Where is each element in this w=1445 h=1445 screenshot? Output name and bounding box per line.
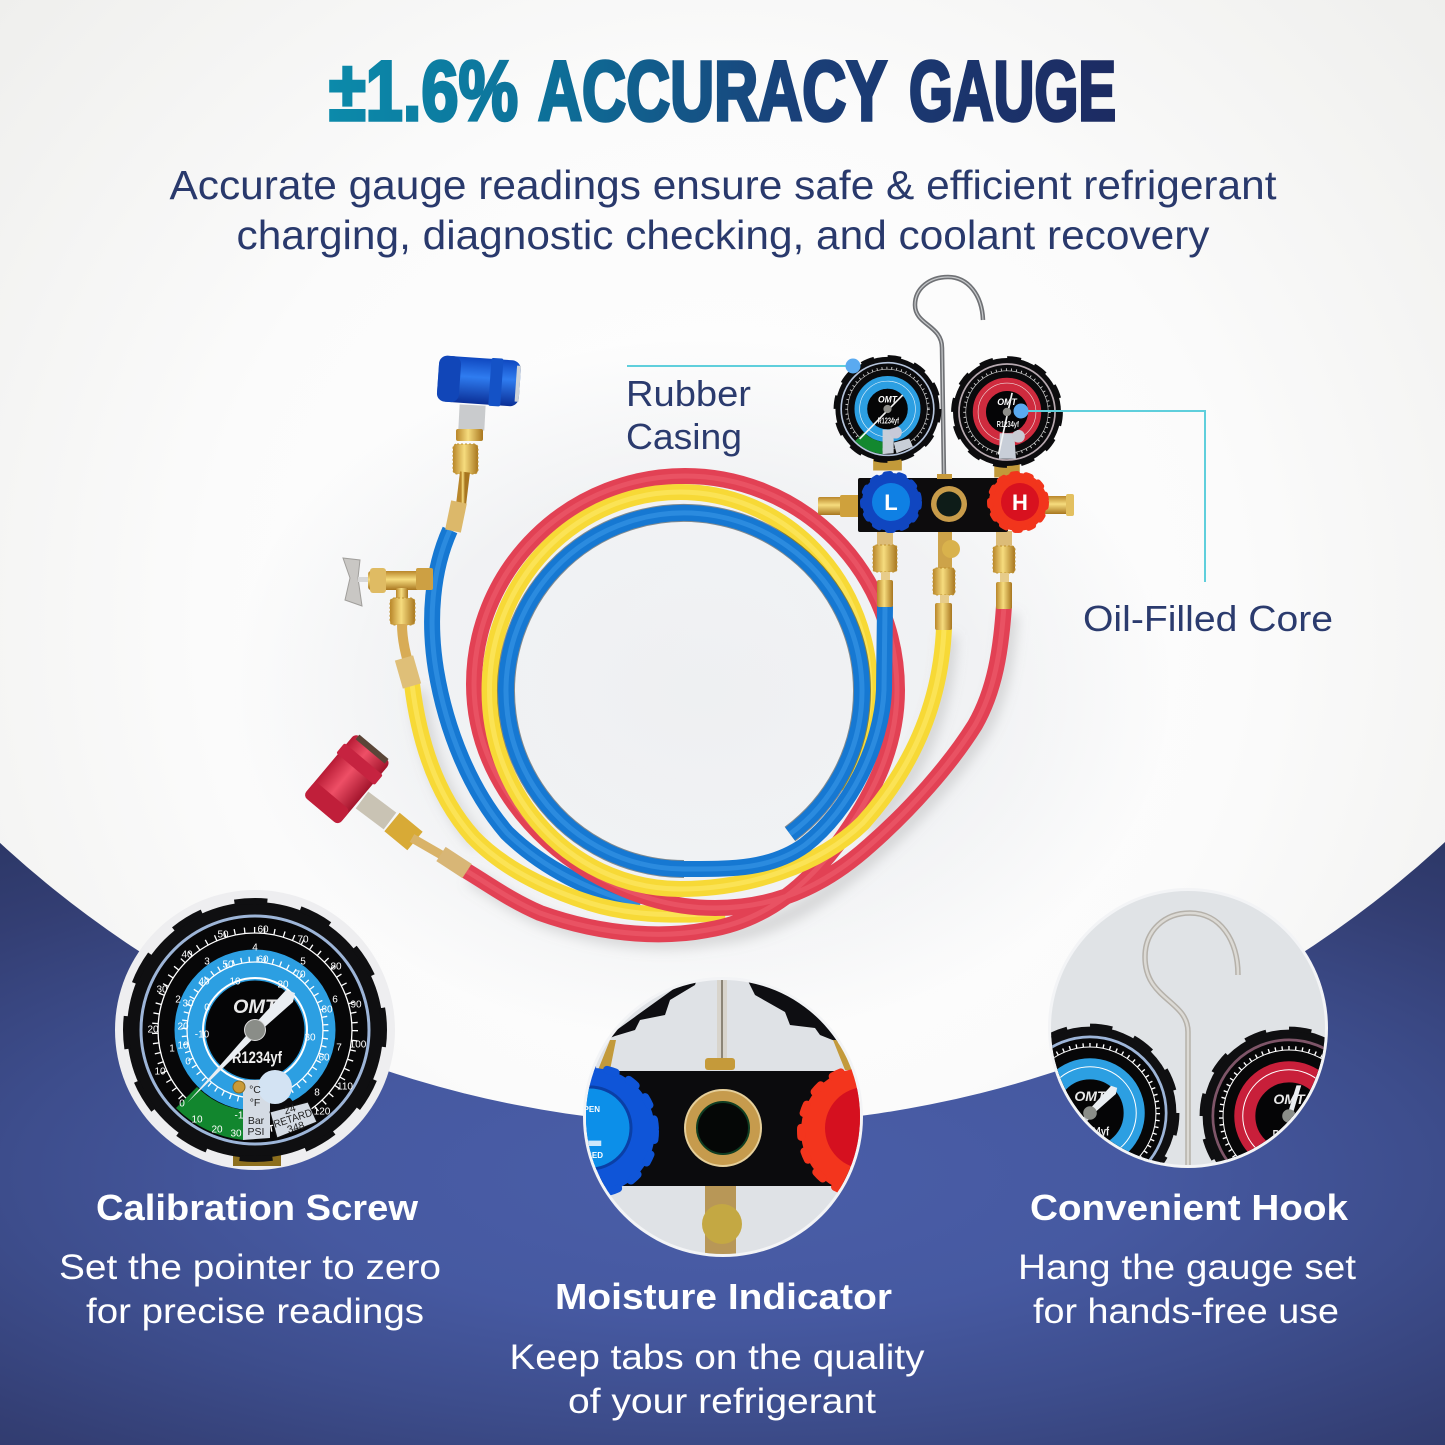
outer scale numbers: 20 [177,1022,189,1033]
blue knob [586,1068,654,1192]
brass cap [702,1204,742,1244]
low side gauge: R1234yf [878,416,899,425]
unit labels: °C [249,1084,261,1096]
moisture sight glass [931,486,967,522]
inset: gauge close-up: R1234yf [232,1048,282,1067]
low side blue knob [862,473,920,531]
nut [705,1058,735,1070]
outer scale numbers: -1 [235,1111,244,1122]
callout: oil-filled core: Oil-Filled Core [1083,598,1333,639]
inset: sight glass close-up: OPEN [577,1105,600,1114]
hook nut [937,474,952,479]
blue hose loop [506,513,862,869]
description [510,1338,925,1421]
calibration screw [233,1081,245,1093]
high side red knob [989,473,1047,531]
lower brass fittings [873,531,1015,630]
outer scale numbers: -10 [195,1030,210,1041]
description [59,1248,441,1331]
outer scale numbers: 40 [181,950,193,961]
panel: moisture indicator [510,970,927,1421]
panel: calibration screw [59,890,441,1331]
unit labels: RETARD [272,1107,314,1131]
description: Hang the gauge set [1018,1248,1356,1287]
outer scale numbers: 20 [147,1025,159,1036]
right gauge: R1234yf [1273,1127,1309,1141]
outer scale numbers: 30 [304,1033,316,1044]
outer scale numbers: 2 [175,995,181,1006]
inset: hook close-up [1050,891,1328,1168]
left side brass fitting [818,495,860,517]
outer scale numbers: 80 [330,962,342,973]
heading: Convenient Hook [1030,1187,1349,1228]
outer scale numbers: 7 [336,1043,342,1054]
gauge bezels [612,982,696,1038]
outer scale numbers: 30 [230,1129,242,1140]
outer scale numbers: 5 [300,957,306,968]
blue hose main [640,606,885,869]
pointer [187,1028,258,1103]
right side brass fitting [1044,494,1074,516]
description: for precise readings [86,1292,424,1331]
unit labels [248,1084,314,1138]
yellow hose free strand [412,684,725,915]
unit labels: 24 [283,1102,297,1117]
callout: oil-filled core [1014,404,1333,639]
zero adjust bubble [258,1070,292,1104]
brass stem [705,1186,736,1261]
white arc panel [0,0,1445,1125]
outer scale numbers: 70 [297,935,309,946]
callout: rubber casing: Rubber [626,373,751,414]
outer scale numbers: 10 [191,1115,203,1126]
unit labels: Bar [248,1115,265,1127]
outer scale numbers: 10 [154,1067,166,1078]
outer scale numbers: 30 [156,985,168,996]
product photo: manifold gauge set [301,277,1074,941]
high side red knob: H [1012,490,1028,515]
low side blue knob: L [884,490,898,515]
outer scale numbers [147,925,367,1140]
outer scale numbers: 6 [332,995,338,1006]
outer scale numbers: 3 [204,957,210,968]
outer scale numbers: 30 [182,999,194,1010]
outer scale numbers: 0 [185,1057,191,1068]
description: of your refrigerant [568,1382,876,1421]
title: ACCURACY [538,44,887,138]
description [1018,1248,1356,1331]
inset: gauge close-up: OMT [233,997,278,1018]
unit labels: 348 [286,1119,306,1136]
red quick coupler [301,731,467,871]
outer scale numbers: 100 [350,1040,367,1051]
outer scale numbers: 20 [211,1125,223,1136]
title: GAUGE [909,44,1116,138]
blue quick coupler [436,354,522,531]
left gauge [1051,1024,1180,1163]
outer scale numbers: 60 [257,955,269,966]
low side gauge: OMT [878,394,898,404]
sight glass [685,1090,761,1166]
T-valve with thumb screw [343,558,433,686]
hook [915,277,983,478]
description: for hands-free use [1033,1292,1339,1331]
callout: rubber casing: Casing [626,416,742,457]
red knob [801,1069,860,1189]
heading: Moisture Indicator [555,1276,892,1317]
outer scale numbers: 10 [229,977,241,988]
outer scale numbers: 50 [217,930,229,941]
panel: convenient hook [1021,891,1356,1324]
hose shadow [418,614,1010,941]
subtitle [170,162,1277,258]
inset: sight glass close-up: L [573,1104,603,1157]
soft shading behind product [230,340,1170,1040]
hook wire [1145,913,1238,1170]
manifold bar [600,1071,850,1186]
description: Keep tabs on the quality [510,1338,925,1377]
title [329,44,1116,138]
unit labels: PSI [248,1126,264,1138]
subtitle: Accurate gauge readings ensure safe & efficient refrigerant [170,162,1277,208]
callout: rubber casing [626,358,860,457]
outer scale numbers: 8 [314,1088,320,1099]
outer scale numbers: 70 [294,970,306,981]
outer scale numbers: 1 [169,1044,175,1055]
outer scale numbers: 4 [252,943,258,954]
low side gauge [835,357,940,470]
right gauge: OMT [1273,1092,1306,1107]
heading: Calibration Screw [96,1187,419,1228]
blue hose free strand [432,530,640,905]
outer scale numbers: 10 [177,1041,189,1052]
inset: gauge close-up [115,890,395,1170]
high side gauge: R1234yf [997,419,1019,429]
outer scale numbers: 40 [198,977,210,988]
outer scale numbers: 80 [321,1005,333,1016]
outer scale numbers: 120 [314,1107,331,1118]
outer scale numbers: 20 [277,980,289,991]
high side gauge [953,358,1061,477]
unit labels: °F [250,1097,260,1109]
manifold body [858,478,1008,532]
right gauge [1200,1026,1325,1162]
inset: sight glass close-up [583,980,863,1257]
outer scale numbers: 50 [222,960,234,971]
outer scale numbers: 60 [318,1053,330,1064]
title: ±1.6% [329,44,518,138]
outer scale numbers: 0 [179,1099,185,1110]
left gauge: R1234yf [1074,1124,1110,1138]
outer scale numbers: 0 [204,1003,210,1014]
description: Set the pointer to zero [59,1248,441,1287]
yellow hose main [490,492,944,889]
outer scale numbers: 60 [257,925,269,936]
red hose [465,476,1004,934]
hook stem [717,975,727,1059]
outer scale numbers: 90 [350,1000,362,1011]
outer scale numbers: 110 [337,1082,353,1093]
high side gauge: OMT [997,397,1018,407]
inset: sight glass close-up: CLOSED [570,1151,603,1160]
subtitle: charging, diagnostic checking, and coolant recovery [236,212,1210,258]
left gauge: OMT [1074,1089,1107,1104]
